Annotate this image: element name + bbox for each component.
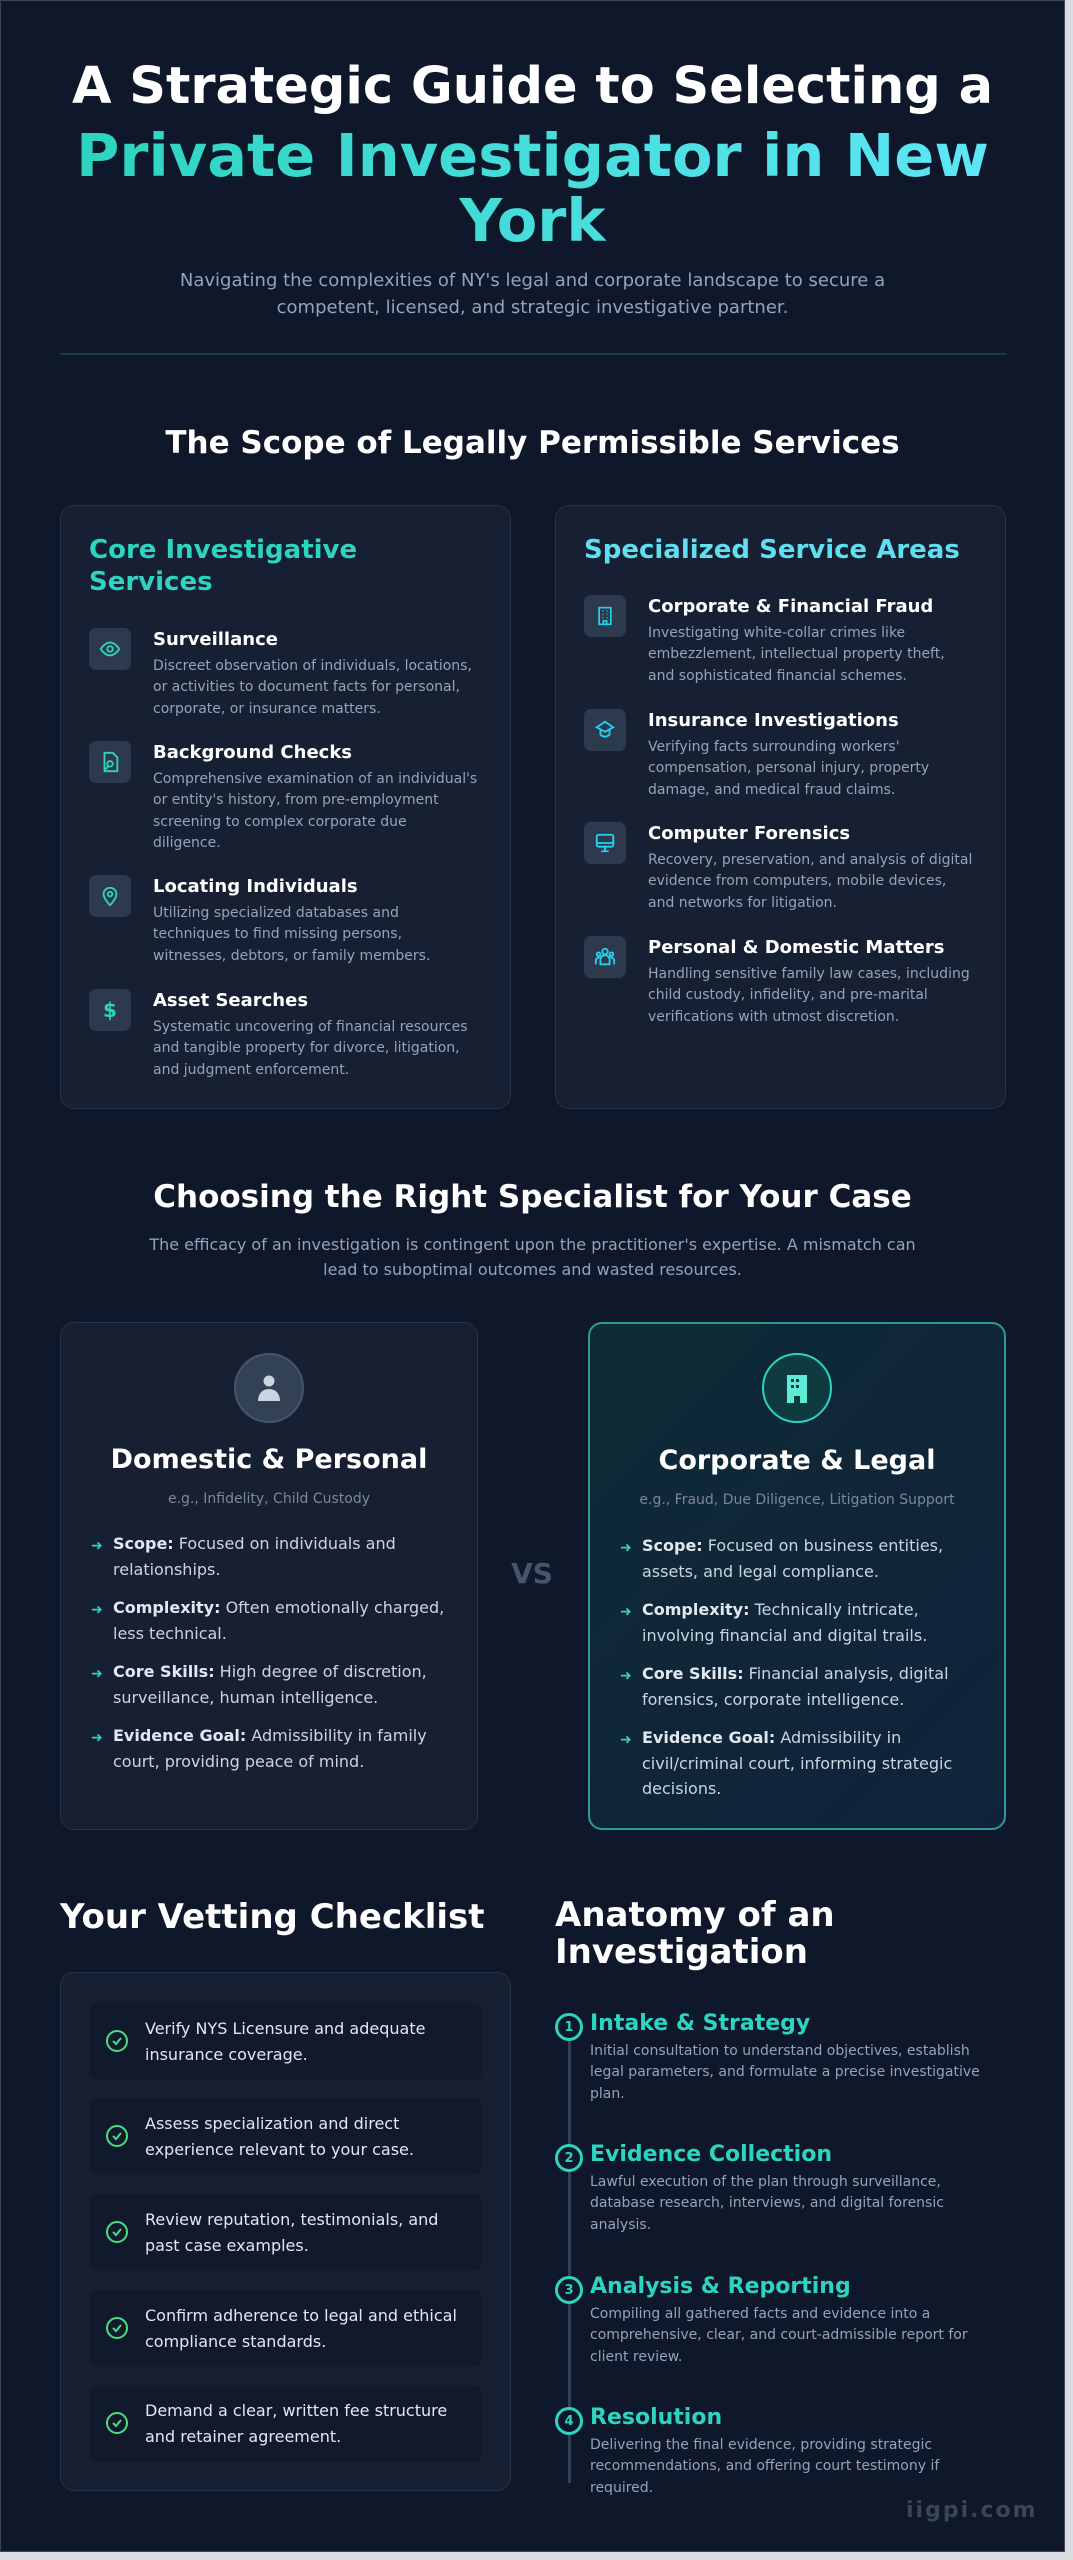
check item 5: Demand a clear, written fee structure and retainer agreement. [145, 2401, 447, 2446]
card: corporate [588, 1322, 1006, 1830]
item: fraud: Corporate & Financial Fraud [648, 596, 933, 617]
step 3 [555, 2274, 968, 2365]
step 2: Lawful execution of the plan through surveillance, database research, interviews, and digital forensic analysis. [590, 2174, 944, 2233]
panel: core services [60, 505, 511, 1109]
item: forensics: evidence from computers, mobile devices, [648, 873, 946, 889]
check item 4 [89, 2290, 482, 2367]
bullets: ➜ [620, 1732, 632, 1748]
bullets: Complexity: Technically intricate, involving financial and digital trails. [642, 1600, 927, 1644]
title: York [459, 186, 606, 255]
title: Private Investigator in New [76, 121, 989, 190]
panel heading: Specialized Service Areas [584, 535, 960, 565]
item: personal: verifications with utmost discretion. [648, 1009, 899, 1025]
item: insurance [584, 709, 929, 798]
item: background: diligence. [153, 835, 221, 851]
text: choosing intro: The efficacy of an investigation is contingent upon the practitioner's expertise. A mismatch can lead to suboptimal outcomes and wasted resources. [149, 1235, 916, 1279]
item: insurance: compensation, personal injury, property [648, 760, 929, 776]
check item 5 [89, 2385, 482, 2462]
check item 3 [89, 2194, 482, 2271]
item: fraud: embezzlement, intellectual property theft, [648, 646, 945, 662]
heading: choosing: Choosing the Right Specialist for Your Case [153, 1179, 912, 1215]
item: surveillance [89, 628, 472, 717]
step 2: 2 [564, 2150, 574, 2166]
item: surveillance: Discreet observation of individuals, locations, [153, 658, 472, 674]
bullets: Complexity: Often emotionally charged, less technical. [113, 1598, 444, 1642]
bullets [620, 1536, 952, 1798]
card title: Domestic & Personal [111, 1444, 427, 1475]
item: assets: Asset Searches [153, 990, 308, 1011]
check item 2: Assess specialization and direct experience relevant to your case. [145, 2114, 414, 2158]
title [72, 57, 993, 255]
step 1: 1 [564, 2020, 574, 2034]
item: forensics: and networks for litigation. [648, 895, 837, 911]
item: fraud: Investigating white-collar crimes like [648, 625, 905, 641]
item: forensics: Recovery, preservation, and analysis of digital [648, 852, 972, 868]
heading: anatomy: Investigation [555, 1932, 808, 1972]
bullets: Scope: Focused on business entities, assets, and legal compliance. [642, 1536, 943, 1580]
text: Intake & Strategy [590, 2011, 810, 2036]
item: background: or entity's history, from pre-employment [153, 792, 439, 808]
check item 3: Review reputation, testimonials, and past case examples. [145, 2210, 438, 2254]
icon: person [234, 1353, 304, 1423]
item: personal: Handling sensitive family law cases, including [648, 966, 970, 982]
item: personal: Personal & Domestic Matters [648, 937, 944, 958]
bullets: Core Skills: High degree of discretion, surveillance, human intelligence. [113, 1662, 427, 1706]
bullets: ➜ [91, 1666, 103, 1682]
step 1: Initial consultation to understand objectives, establish legal parameters, and formulate a precise investigative plan. [590, 2043, 980, 2102]
item: surveillance: corporate, or insurance matters. [153, 701, 381, 717]
item: surveillance: Surveillance [153, 629, 278, 650]
heading: scope: The Scope of Legally Permissible Services [165, 425, 900, 461]
bullets: Evidence Goal: Admissibility in civil/criminal court, informing strategic decisions. [642, 1728, 952, 1798]
item: personal: child custody, infidelity, and pre-marital [648, 987, 928, 1003]
bullets: Core Skills: Financial analysis, digital forensics, corporate intelligence. [642, 1664, 949, 1708]
heading: anatomy [555, 1895, 835, 1972]
watermark: iigpi.com [906, 2498, 1038, 2523]
card: domestic: e.g., Infidelity, Child Custody [168, 1491, 370, 1507]
item: assets [89, 989, 468, 1078]
bullets: Evidence Goal: Admissibility in family court, providing peace of mind. [113, 1726, 427, 1770]
check item 1: Verify NYS Licensure and adequate insurance coverage. [145, 2019, 425, 2064]
panel heading: Services [89, 567, 213, 597]
bullets: ➜ [91, 1602, 103, 1618]
step 3: Compiling all gathered facts and evidence into a comprehensive, clear, and court-admissible report for client review. [590, 2306, 968, 2365]
step 4: 4 [564, 2414, 574, 2428]
heading: anatomy: Anatomy of an [555, 1895, 835, 1935]
step 2 [555, 2142, 944, 2233]
item: insurance: damage, and medical fraud claims. [648, 782, 895, 798]
item: locating [89, 875, 430, 964]
step 4: Delivering the final evidence, providing strategic recommendations, and offering court testimony if required. [590, 2437, 939, 2496]
item: assets: Systematic uncovering of financial resources [153, 1019, 468, 1035]
item: locating: Locating Individuals [153, 876, 358, 897]
card: corporate: e.g., Fraud, Due Diligence, Litigation Support [639, 1492, 955, 1508]
icon: building [762, 1353, 832, 1423]
card: domestic [60, 1322, 478, 1830]
item: background: Background Checks [153, 742, 352, 763]
item: fraud: and sophisticated financial schemes. [648, 668, 907, 684]
bullets [91, 1534, 444, 1770]
bullets: ➜ [620, 1540, 632, 1556]
subtitle: Navigating the complexities of NY's legal and corporate landscape to secure a competent, licensed, and strategic investigative partner. [180, 270, 885, 318]
panel: specialized areas [555, 505, 1006, 1109]
check item 1 [89, 2003, 482, 2080]
item: surveillance: or activities to document facts for personal, [153, 679, 460, 695]
text: Analysis & Reporting [590, 2274, 851, 2299]
panel heading: Core Investigative [89, 535, 357, 565]
step 3: 3 [564, 2282, 574, 2298]
text: Resolution [590, 2405, 722, 2430]
item: locating: Utilizing specialized databases and [153, 905, 399, 921]
item: forensics [584, 822, 972, 911]
panel: checklist [60, 1972, 511, 2491]
heading: checklist: Your Vetting Checklist [60, 1897, 485, 1937]
vs label: VS [511, 1557, 553, 1590]
item: locating: witnesses, debtors, or family members. [153, 948, 430, 964]
card title: Corporate & Legal [658, 1445, 935, 1476]
item: personal [584, 936, 970, 1025]
check item 2 [89, 2098, 482, 2175]
bullets: ➜ [620, 1668, 632, 1684]
item: assets: and judgment enforcement. [153, 1062, 349, 1078]
item: locating: techniques to find missing persons, [153, 926, 402, 942]
item: forensics: Computer Forensics [648, 823, 850, 844]
bullets: Scope: Focused on individuals and relationships. [113, 1534, 396, 1578]
item: assets: and tangible property for divorce, litigation, [153, 1040, 460, 1056]
check item 4: Confirm adherence to legal and ethical compliance standards. [145, 2306, 457, 2350]
item: fraud [584, 595, 945, 684]
item: insurance: Insurance Investigations [648, 710, 899, 731]
item: background: Comprehensive examination of an individual's [153, 771, 477, 787]
panel heading [89, 535, 357, 597]
title: A Strategic Guide to Selecting a [72, 57, 993, 116]
item: background [89, 741, 477, 851]
text: Evidence Collection [590, 2142, 832, 2167]
bullets: ➜ [91, 1538, 103, 1554]
step 1 [555, 2011, 980, 2102]
bullets: ➜ [91, 1730, 103, 1746]
item: insurance: Verifying facts surrounding workers' [648, 739, 900, 755]
item: assets: $ [103, 998, 117, 1022]
item: background: screening to complex corporate due [153, 814, 407, 830]
step 4 [555, 2405, 940, 2496]
bullets: ➜ [620, 1604, 632, 1620]
